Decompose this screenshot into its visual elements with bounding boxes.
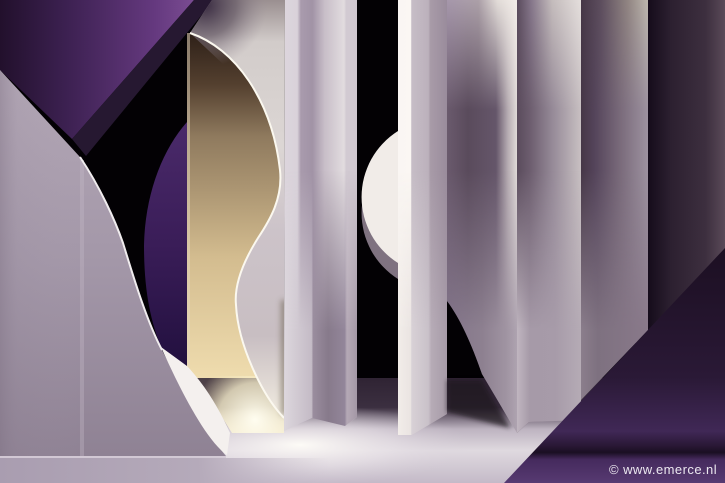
curved panel olive shade on right edge xyxy=(281,300,287,415)
column three lower light xyxy=(447,170,517,433)
gold panel left edge highlight xyxy=(187,33,190,378)
dark triangle: bottom right xyxy=(504,248,725,483)
left panel light seam xyxy=(80,160,84,456)
dark purple band xyxy=(72,0,214,156)
watermark: © www.emerce.nl xyxy=(609,462,717,477)
sphere lit face xyxy=(362,131,398,263)
floor line under left panel xyxy=(0,456,226,458)
column two upper faces xyxy=(398,0,447,435)
column group two xyxy=(398,0,447,435)
purple panel: top left xyxy=(0,0,194,139)
curved white panel xyxy=(190,0,285,418)
purple circle behind gold panel xyxy=(144,122,187,366)
column four middle face xyxy=(517,0,581,433)
left panel white curve rim xyxy=(80,157,162,350)
sphere shaded underside xyxy=(362,147,398,279)
left panel inner shade xyxy=(0,70,80,456)
column five top light xyxy=(616,0,648,84)
white sphere xyxy=(362,131,398,279)
gold inner panel xyxy=(187,33,284,378)
lower left floor xyxy=(0,458,330,483)
column group one xyxy=(284,0,357,431)
curved panel bright rim xyxy=(190,33,284,418)
column group five xyxy=(581,0,648,400)
column one upper faces xyxy=(284,0,357,431)
floor xyxy=(0,378,725,483)
column group four xyxy=(517,0,581,433)
column four lower light xyxy=(517,170,581,433)
column two lower faces xyxy=(398,230,447,435)
column three middle face xyxy=(447,0,517,433)
column six: dark xyxy=(648,0,725,330)
soft floor light xyxy=(130,405,470,483)
column three top light xyxy=(447,0,517,110)
left paper panel xyxy=(0,70,226,456)
column one lower faces xyxy=(284,184,357,426)
glowing floor inside doorway xyxy=(196,376,284,433)
black shadow on floor under notch xyxy=(447,380,510,428)
column four top light xyxy=(522,0,581,92)
column group three xyxy=(447,0,517,433)
column five middle face xyxy=(581,0,648,400)
column five lower light xyxy=(581,170,648,400)
white curled paper fold xyxy=(161,347,230,455)
shadow at top of curved panel xyxy=(190,0,285,80)
